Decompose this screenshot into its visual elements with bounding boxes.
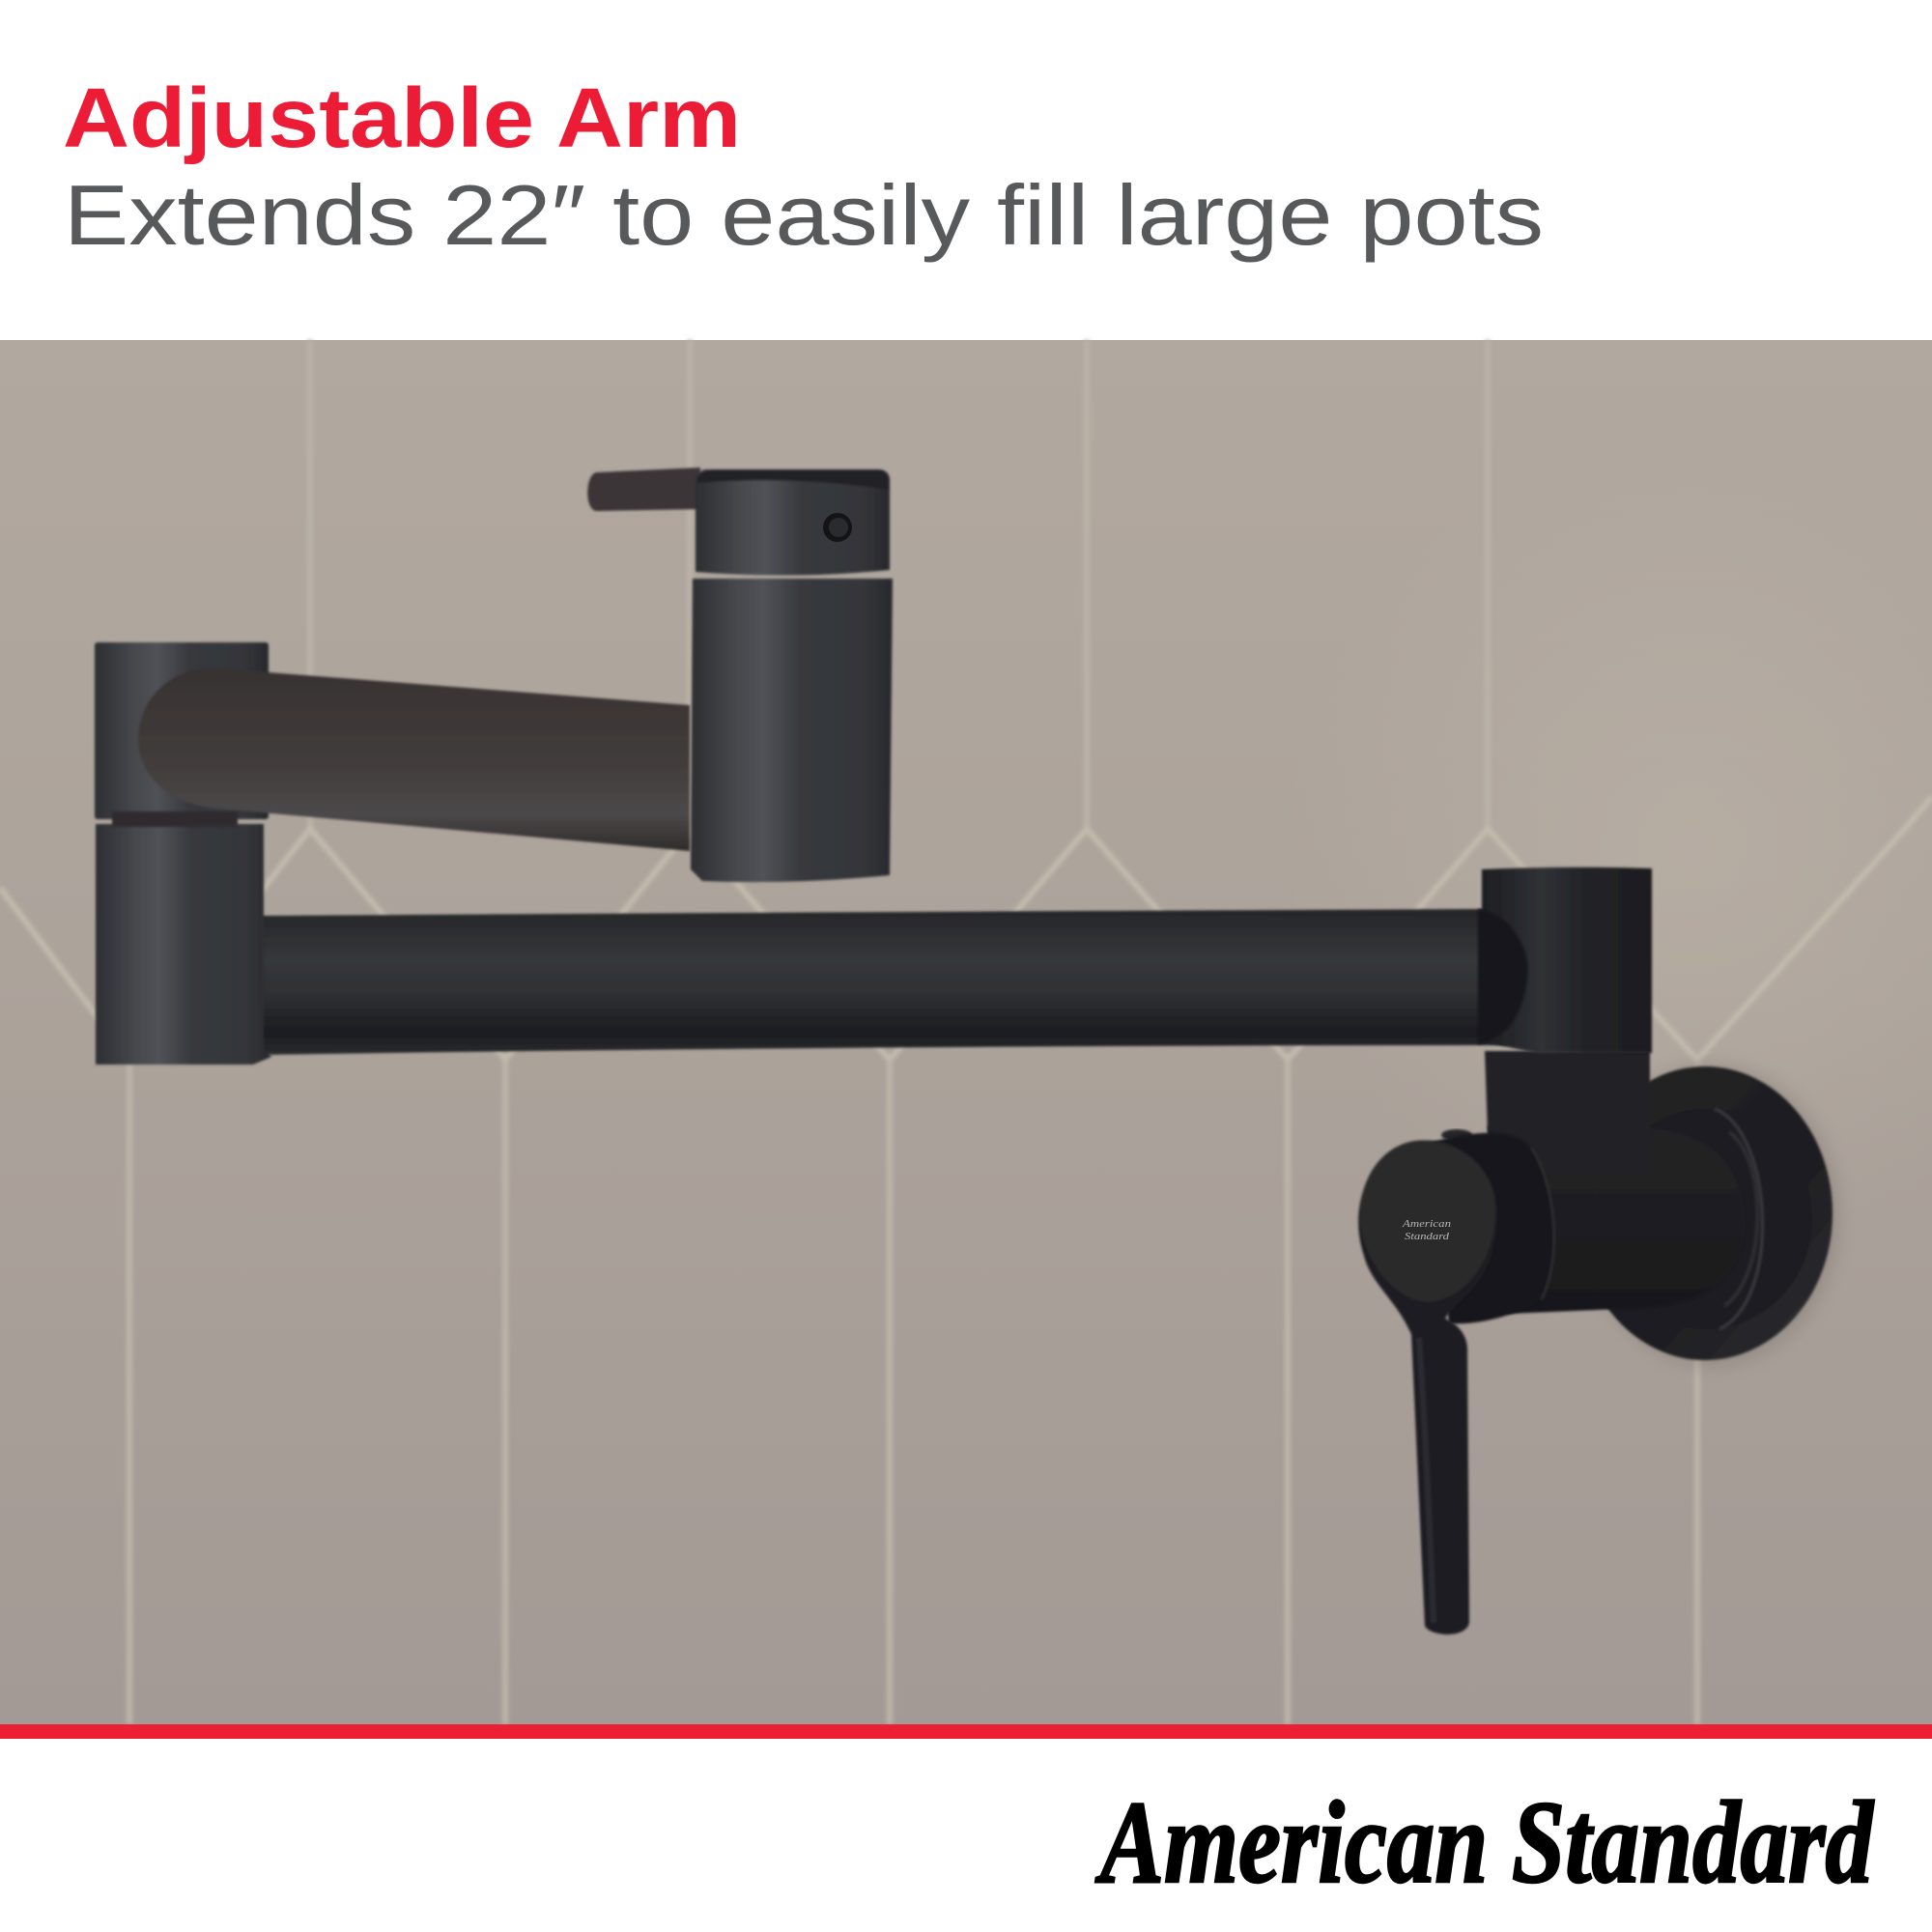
title: Adjustable Arm: Adjustable Arm: [63, 71, 741, 165]
faucet: valve collar: [1430, 1133, 1554, 1323]
faucet: right riser lower section: [1485, 1051, 1650, 1174]
faucet: spout head handle stub: [587, 468, 700, 511]
logo on lever disc: Standard: [1405, 1231, 1450, 1242]
faucet: horizontal valve body: [1488, 1125, 1745, 1314]
faucet: left upper pivot: [95, 642, 269, 819]
faucet: lever disc and handle: [1358, 1141, 1497, 1634]
faucet: left lower pivot: [96, 824, 271, 1065]
faucet: spout top cap: [696, 469, 890, 576]
subtitle: Extends 22 inches: Extends 22″ to easily fill large pots: [64, 167, 1544, 263]
wall shadow around faucet: [1584, 1065, 1839, 1366]
faucet: upper swing arm: [112, 668, 690, 851]
panel: product photo of wall-mounted pot filler: [0, 340, 1932, 1724]
faucet: right riser upper section: [1482, 867, 1652, 1053]
faucet: long lower arm: [261, 909, 1536, 1055]
red divider bar: [0, 1724, 1932, 1739]
faucet: spout lower body: [691, 579, 893, 882]
icon: set screw on spout cap: [823, 513, 852, 542]
faucet: arm socket end: [1478, 909, 1528, 1044]
logo on lever disc: American: [1402, 1218, 1452, 1230]
tile wall background: [0, 340, 1932, 1724]
heading block: [63, 71, 1544, 263]
logo on lever disc: [1402, 1218, 1452, 1242]
faucet: wall flange: [1577, 1066, 1833, 1360]
faucet: top button: [1441, 1129, 1472, 1141]
